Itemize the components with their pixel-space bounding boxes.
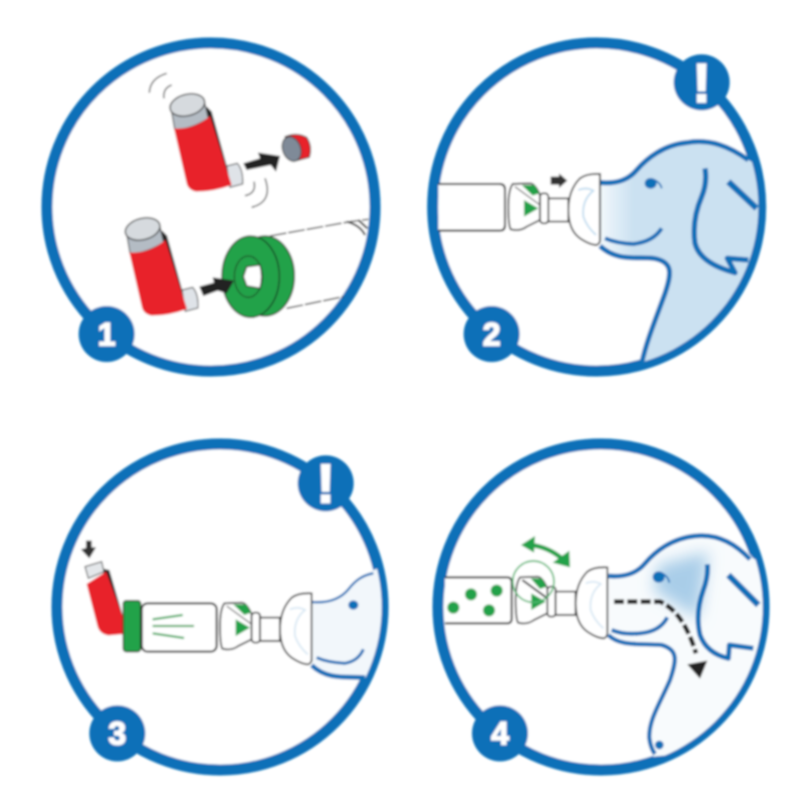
- icon: green spacer collar: [222, 236, 294, 317]
- badge: warning: !: [693, 52, 711, 114]
- badge: step number 4: 4: [491, 716, 509, 752]
- arrow: dashed path of inhaled air: [614, 602, 707, 679]
- icon: spacer valve and mask: [516, 567, 607, 638]
- icon: spacer tube: [438, 184, 505, 231]
- badge: step number 3: 3: [108, 716, 126, 752]
- badge: step number 4: [472, 705, 528, 761]
- badge: warning: [674, 52, 730, 114]
- icon: spacer valve and mask: [220, 593, 312, 664]
- arrow: press canister: [81, 541, 96, 558]
- icon: inhaler cap: [279, 134, 311, 164]
- badge: warning: !: [317, 453, 335, 515]
- badge: step number 1: 1: [98, 316, 116, 352]
- arrow: move mask to muzzle: [551, 173, 567, 188]
- icon: red inhaler pressed down: [85, 562, 124, 635]
- icon: inhaler ready to insert: [123, 214, 198, 316]
- arrow: remove cap: [243, 153, 280, 172]
- icon: motion arcs bottom: [245, 178, 267, 207]
- panel: step 4 dog inhales while valve moves: [438, 444, 773, 770]
- icon: spacer valve and mask: [508, 174, 600, 245]
- ring: step 3: [57, 444, 383, 770]
- panel: step 3 press inhaler into spacer: [57, 444, 398, 770]
- badge: step number 2: [464, 306, 520, 362]
- panel: step 2 place mask on dog's muzzle: [433, 43, 767, 371]
- ring: step 2: [433, 43, 761, 371]
- arrow: valve movement: [521, 536, 570, 567]
- ring: step 1: [47, 43, 375, 371]
- icon: motion arcs top: [149, 73, 172, 98]
- icon: green highlight circle on valve: [513, 561, 554, 602]
- ring: step 4: [438, 444, 764, 770]
- badge: step number 1: [79, 306, 135, 362]
- icon: spacer tube with spray: [142, 603, 217, 652]
- icon: spacer tube outline: [270, 219, 368, 308]
- badge: step number 2: 2: [483, 316, 501, 352]
- icon: green spacer collar: [123, 601, 141, 652]
- illustration: dog head: [600, 142, 767, 363]
- badge: warning: [298, 453, 354, 515]
- illustration: dog head with inhaled dose: [608, 535, 773, 757]
- icon: inhaler being shaken: [168, 90, 243, 192]
- arrow: insert inhaler: [199, 277, 234, 296]
- panel: step 1 shake inhaler and fit to spacer: [47, 43, 375, 371]
- illustration: dog head pale: [309, 566, 384, 682]
- icon: spacer tube with particles: [445, 577, 512, 623]
- badge: step number 3: [89, 705, 145, 761]
